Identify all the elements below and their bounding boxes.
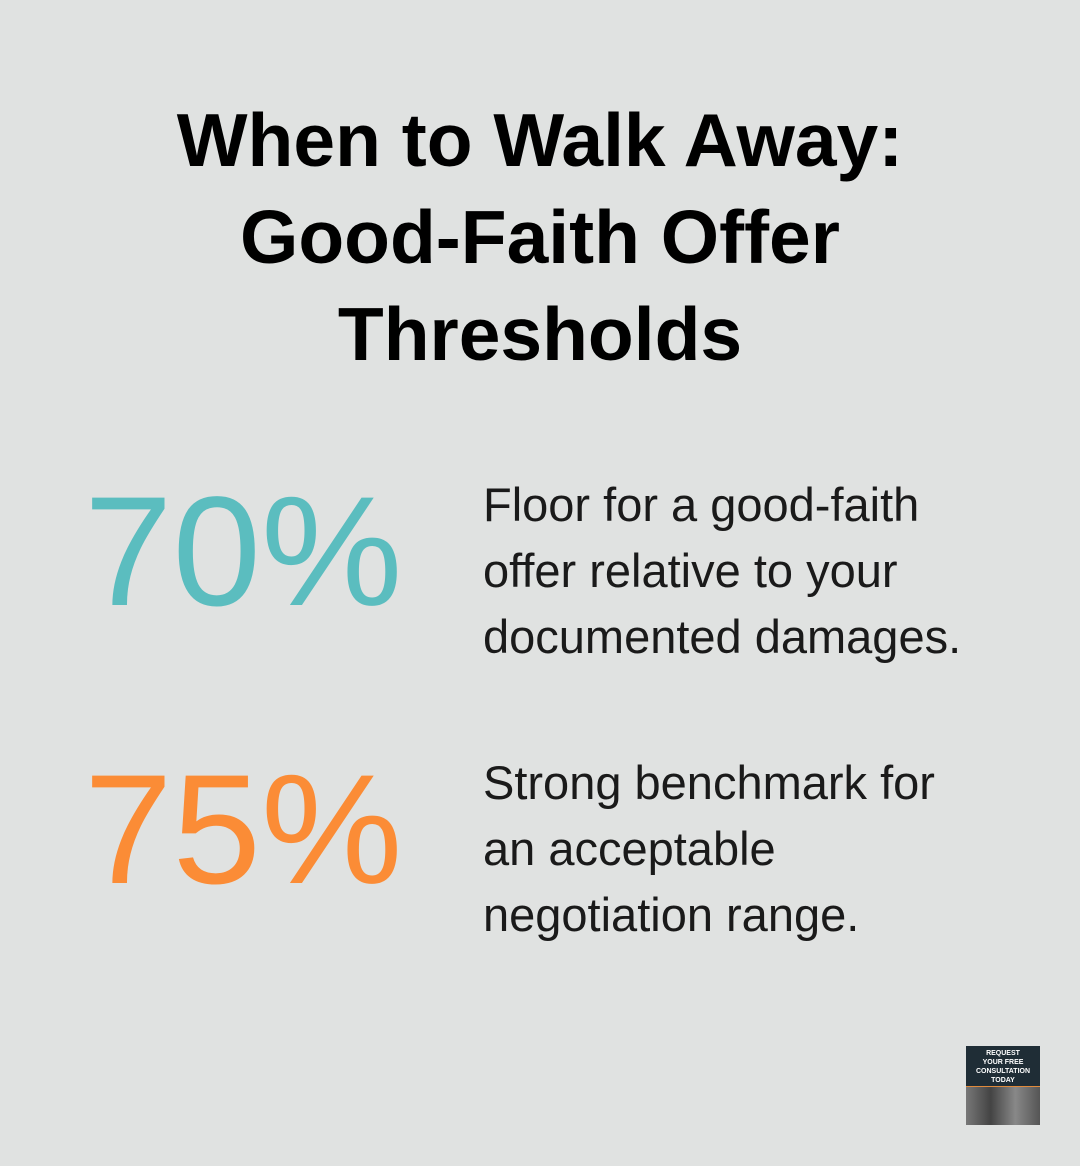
text: 75% description <box>483 756 935 941</box>
title: Good-Faith Offer <box>240 195 840 279</box>
logo: consultation badge <box>966 1046 1040 1125</box>
text: 70% description: offer relative to your <box>483 544 898 597</box>
logo: consultation badge: YOUR FREE <box>983 1059 1023 1066</box>
text: 75% description: negotiation range. <box>483 888 859 941</box>
logo: consultation badge: CONSULTATION <box>976 1068 1030 1075</box>
text: 75% description: Strong benchmark for <box>483 756 935 809</box>
stat: 75%: 75% <box>84 743 402 917</box>
logo: consultation badge: REQUEST <box>986 1050 1020 1057</box>
text: 70% description: documented damages. <box>483 610 961 663</box>
title: When to Walk Away: <box>177 98 903 182</box>
text: 70% description: Floor for a good-faith <box>483 478 919 531</box>
title: Thresholds <box>338 292 742 376</box>
stat: 70%: 70% <box>84 465 402 639</box>
text: 75% description: an acceptable <box>483 822 776 875</box>
text: 70% description <box>483 478 961 663</box>
logo: consultation badge: TODAY <box>991 1077 1015 1084</box>
title <box>176 98 903 376</box>
